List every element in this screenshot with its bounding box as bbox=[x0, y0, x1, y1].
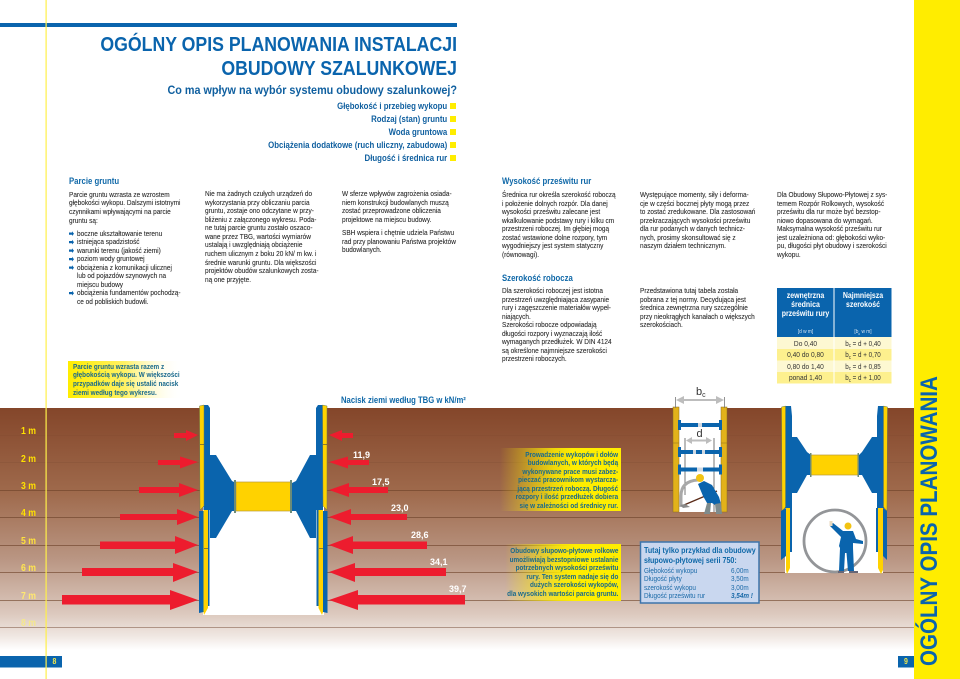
text column 2: projektów obudów szalunkowych zosta- bbox=[205, 266, 319, 275]
depth scale labels: 2 m bbox=[21, 454, 36, 465]
text column 4 top: (równowagi). bbox=[502, 250, 539, 258]
table first column: 0,80 do 1,40 bbox=[787, 362, 824, 370]
chart heading: Nacisk ziemi według TBG w kN/m² bbox=[341, 394, 466, 404]
example box backing bbox=[640, 542, 759, 603]
text column 3: niem konstrukcji budowlanych muszą bbox=[342, 198, 449, 207]
example box labels: Głębokość wykopu bbox=[644, 566, 697, 574]
text column 4 top: wysokości prześwitu zalecane jest bbox=[502, 207, 600, 216]
text: factors list: obciążenia fundamentów pochodzą- bbox=[77, 288, 181, 297]
text column 6: wykopu. bbox=[777, 250, 801, 258]
table second column: bc = d + 0,70 bbox=[845, 350, 881, 360]
right yellow band bbox=[914, 0, 960, 679]
text: factors list: miejscu budowy bbox=[77, 280, 123, 288]
text column 3: W sferze wpływów zagrożenia osiada- bbox=[342, 189, 452, 198]
depth scale labels: 1 m bbox=[21, 426, 36, 437]
text: factors list: lub od pojazdów szynowych na bbox=[77, 271, 166, 280]
text column 4 top: przestrzeni roboczej. Im głębiej mogą bbox=[502, 224, 609, 233]
text column 2: ne tutaj parcie gruntu zostało oszaco- bbox=[205, 223, 312, 232]
example box values: 3,50m bbox=[731, 574, 749, 583]
influence factor list: Głębokość i przebieg wykopu bbox=[337, 101, 447, 111]
text column 4 top: wkalkulowanie podstawy rury i kilku cm bbox=[502, 216, 614, 224]
example box heading: Tutaj tylko przykład dla obudowy bbox=[644, 545, 756, 555]
text: factors list: istniejąca spadzistość bbox=[77, 237, 140, 246]
depth scale labels: 5 m bbox=[21, 536, 36, 547]
text column 5 top: nych, prosimy skonsultować się z bbox=[640, 232, 736, 242]
example box labels bbox=[644, 566, 705, 600]
text column 2: ruchem ulicznym z boku 20 kN/ m kw. i bbox=[205, 249, 316, 258]
text column 5 bottom: przy nieokrągłych kanałach o większych bbox=[640, 312, 755, 320]
text column 2: ustalają i uwzględniają obciążenie bbox=[205, 240, 302, 249]
text: factors list: obciążenia z komunikacji ulicznej bbox=[77, 262, 172, 272]
vertical section title: OGÓLNY OPIS PLANOWANIA bbox=[916, 376, 943, 666]
table first column: Do 0,40 bbox=[794, 338, 817, 348]
text column 6: Maksymalna wysokość prześwitu rur bbox=[777, 224, 882, 233]
arrow bullets bbox=[69, 231, 74, 296]
text column 3 second paragraph: rad przy planowaniu Państwa projektów bbox=[342, 237, 456, 246]
text column 2: ną one przyjęte. bbox=[205, 275, 251, 284]
text: factors list bbox=[77, 228, 181, 306]
ground depth lines bbox=[0, 436, 914, 628]
right shoring and strut bbox=[781, 406, 888, 574]
page number bar left bbox=[0, 656, 62, 668]
text column 4 bottom: niających. bbox=[502, 312, 531, 320]
worker with shovel bbox=[680, 474, 722, 514]
table header right bbox=[843, 291, 884, 309]
table second column: bc = d + 0,40 bbox=[845, 338, 881, 349]
left pressure arrows bbox=[62, 430, 198, 610]
text column 5 top: cje w części bocznej płyty mogą przez bbox=[640, 198, 749, 208]
text: Parcie gruntu intro: czynnikami wpływającymi na parcie bbox=[69, 207, 171, 216]
page number 9: 9 bbox=[904, 657, 908, 666]
depth scale labels: 6 m bbox=[21, 563, 36, 574]
text column 3: zostać przeprowadzone obliczenia bbox=[342, 206, 441, 215]
top blue rule bbox=[0, 23, 457, 27]
text column 6: pu, długości płyt obudowy i szerokości bbox=[777, 241, 887, 250]
text column 5 top: dla rur podanych w danych technicz- bbox=[640, 224, 745, 233]
table first column: 0,40 do 0,80 bbox=[787, 350, 824, 359]
pressure values: 28,6 bbox=[411, 530, 429, 540]
text column 3 second paragraph bbox=[342, 228, 456, 254]
example box values: 3,00m bbox=[731, 582, 749, 592]
example box values bbox=[731, 566, 753, 600]
middle shoring diagram: c bbox=[702, 392, 706, 399]
text: Parcie gruntu intro bbox=[69, 190, 180, 225]
yellow hairline bbox=[46, 0, 47, 679]
title: OGÓLNY OPIS PLANOWANIA INSTALACJI bbox=[100, 34, 457, 56]
example box labels: szerokość wykopu bbox=[644, 582, 696, 592]
example box values: 3,54m ! bbox=[731, 591, 753, 600]
yellow note: working space: jącą przestrzeń roboczą. Długość bbox=[517, 484, 618, 493]
depth scale labels bbox=[21, 426, 36, 629]
text column 5 bottom bbox=[640, 286, 755, 329]
table bbox=[777, 288, 892, 384]
text column 4 bottom bbox=[502, 286, 612, 363]
text column 5 bottom: średnica zewnętrzna rury szczególnie bbox=[640, 303, 748, 312]
text column 4 bottom: przestrzeń uwzględniająca zasypanie bbox=[502, 294, 609, 304]
left shoring and strut bbox=[199, 405, 328, 615]
text: factors list: ce od pobliskich budowli. bbox=[77, 296, 149, 306]
text column 2: wane przez TBG, wartości wymiarów bbox=[205, 232, 311, 241]
yellow note: roller system: Obudowy słupowo-płytowe rolkowe bbox=[510, 546, 618, 555]
dimension arrow: bc bbox=[676, 396, 724, 404]
yellow note backing left bbox=[68, 361, 183, 398]
text column 2: bliżeniu z załączonego wykresu. Poda- bbox=[205, 215, 316, 224]
yellow note: working space: się w zależności od średnicy rur. bbox=[519, 501, 618, 510]
text column 6: Dla Obudowy Słupowo-Płytowej z sys- bbox=[777, 190, 887, 199]
pressure values: 11,9 bbox=[353, 450, 370, 460]
text column 6 bbox=[776, 190, 887, 258]
text column 3 bbox=[342, 189, 452, 224]
table header right: Najmniejsza bbox=[843, 291, 883, 300]
table second column bbox=[845, 338, 881, 384]
text column 2: Nie ma żadnych czułych urządzeń do bbox=[205, 189, 312, 198]
text column 6: temem Rozpór Rolkowych, wysokość bbox=[777, 198, 884, 208]
pressure values: 34,1 bbox=[430, 557, 448, 567]
text column 4 bottom: długości rozpory i wyznaczają ilość bbox=[502, 328, 602, 338]
text: factors list: poziom wody gruntowej bbox=[77, 254, 145, 263]
text column 4 bottom: Szerokości robocze odpowiadają bbox=[502, 320, 597, 329]
text column 2: wykorzystania przy obliczaniu parcia bbox=[205, 198, 310, 207]
table unit right: [bc w m] bbox=[854, 329, 872, 336]
influence factor list bbox=[268, 101, 448, 163]
influence factor list: Obciążenia dodatkowe (ruch uliczny, zabudowa) bbox=[268, 140, 447, 150]
influence factor list: Rodzaj (stan) gruntu bbox=[371, 114, 447, 124]
text column 2: gruntu, zostaje ono odczytane w przy- bbox=[205, 206, 314, 215]
table header right: szerokość bbox=[846, 300, 880, 309]
yellow note: roller system: umożliwiają bezstopniowe ustalanie bbox=[509, 555, 618, 564]
text column 5 bottom: szerokościach. bbox=[640, 320, 683, 329]
example box labels: Długość płyty bbox=[644, 574, 682, 583]
table first column bbox=[787, 338, 824, 382]
text column 5 top bbox=[640, 190, 755, 250]
yellow note: roller system: potrzebnych wysokości prześwitu bbox=[515, 563, 618, 572]
ground gradient bbox=[0, 408, 914, 650]
pressure values bbox=[353, 450, 467, 594]
text column 3 second paragraph: budowlanych. bbox=[342, 245, 382, 254]
yellow note: working space: rozpory i ilość przedłużek dobiera bbox=[516, 492, 618, 501]
influence factor list: Woda gruntowa bbox=[388, 127, 447, 137]
table unit left: [d w m] bbox=[798, 329, 813, 335]
text: factors list: boczne ukształtowanie terenu bbox=[77, 228, 162, 238]
text column 4 top: zostać wstawione dolne rozpory, tym bbox=[502, 232, 607, 242]
text column 4 bottom: rury i zagęszczenie materiałów wypeł- bbox=[502, 303, 611, 312]
text column 4 top: wygodniejszy jest system statyczny bbox=[502, 241, 603, 250]
example box labels: Długość prześwitu rur bbox=[644, 591, 705, 600]
subtitle: Co ma wpływ na wybór systemu obudowy szalunkowej? bbox=[167, 85, 457, 97]
faded yellow note backing 2 bbox=[505, 544, 621, 601]
pressure values: 39,7 bbox=[449, 584, 467, 594]
heading: Szerokość robocza: Szerokość robocza bbox=[502, 272, 573, 284]
text column 6: prześwitu dla rur może być bezstop- bbox=[777, 207, 881, 216]
text: factors list: warunki terenu (jakość ziemi) bbox=[77, 246, 161, 254]
yellow note: roller system: rury. Ten system nadaje się do bbox=[526, 572, 618, 581]
yellow note: working space: wykonywane prace musi zabez- bbox=[522, 467, 618, 476]
yellow note: pressure bbox=[73, 362, 180, 397]
heading: Parcie gruntu: Parcie gruntu bbox=[69, 176, 119, 186]
table header left: prześwitu rury bbox=[782, 309, 829, 318]
yellow note: pressure: Parcie gruntu wzrasta razem z bbox=[73, 362, 164, 370]
table header left bbox=[782, 291, 830, 318]
text: Parcie gruntu intro: gruntu są: bbox=[69, 216, 98, 225]
middle shoring diagram: d bbox=[696, 428, 703, 440]
yellow note: working space: Prowadzenie wykopów i dołów bbox=[525, 450, 618, 458]
table second column: bc = d + 1,00 bbox=[845, 373, 881, 384]
text column 5 bottom: Przedstawiona tutaj tabela została bbox=[640, 286, 738, 295]
yellow note: roller system bbox=[507, 546, 618, 598]
pipe ring bbox=[804, 510, 866, 572]
text column 3 second paragraph: SBH wspiera i chętnie udziela Państwu bbox=[342, 228, 454, 237]
depth scale labels: 7 m bbox=[21, 591, 36, 602]
pressure values: 17,5 bbox=[372, 477, 390, 487]
text column 5 bottom: pobrana z tej normy. Decydująca jest bbox=[640, 294, 746, 304]
text column 2: średnie warunki gruntu. Dla większości bbox=[205, 258, 316, 266]
heading: Wysokość prześwitu rur: Wysokość prześwitu rur bbox=[502, 176, 591, 186]
table header left: średnica bbox=[791, 300, 820, 309]
text column 5 top: Występujące momenty, siły i deforma- bbox=[640, 190, 749, 199]
yellow note: working space: budowlanych, w których będą bbox=[528, 458, 618, 467]
pressure values: 23,0 bbox=[391, 503, 409, 513]
yellow note: pressure: głębokością wykopu. W większości bbox=[73, 370, 180, 379]
dimension arrow: d bbox=[686, 437, 712, 444]
text: Parcie gruntu intro: Parcie gruntu wzrasta ze wzrostem bbox=[69, 190, 170, 198]
faded yellow note backing 1 bbox=[500, 448, 621, 511]
worker figure bbox=[830, 521, 863, 572]
text column 3: projektowe na miejscu budowy. bbox=[342, 215, 431, 224]
yellow note: roller system: dla wysokich wartości parcia gruntu. bbox=[507, 589, 618, 598]
text: Parcie gruntu intro: głębokości wykopu. Dalszymi istotnymi bbox=[69, 198, 180, 207]
right pressure arrows bbox=[329, 430, 465, 610]
title bbox=[100, 32, 457, 80]
text column 4 top: i położenie dolnych rozpór. Dla danej bbox=[502, 198, 608, 208]
excavation: right trench bbox=[785, 404, 883, 573]
text column 4 bottom: przestrzeni roboczych. bbox=[502, 354, 567, 363]
yellow note: working space bbox=[516, 450, 618, 510]
table header left: zewnętrzna bbox=[787, 291, 824, 300]
middle shoring diagram bbox=[673, 386, 727, 512]
excavation: left trench bbox=[203, 404, 324, 615]
text column 6: jest uzależniona od: głębokości wyko- bbox=[777, 232, 885, 242]
excavation: middle trench bbox=[676, 404, 724, 512]
text column 4 top: Średnica rur określa szerokość roboczą bbox=[502, 190, 616, 199]
depth scale labels: 4 m bbox=[21, 508, 36, 519]
page number box right bbox=[898, 656, 914, 668]
example box heading bbox=[644, 545, 756, 565]
text column 4 bottom: wymaganych przedłużek. W DIN 4124 bbox=[502, 337, 612, 346]
depth scale labels: 3 m bbox=[21, 481, 36, 492]
example box values: 6,00m bbox=[731, 566, 749, 574]
text column 5 top: to zostać zredukowane. Dla zastosowań bbox=[640, 207, 755, 216]
table second column: bc = d + 0,85 bbox=[845, 362, 881, 372]
middle shoring diagram: b bbox=[696, 386, 702, 398]
text column 4 bottom: Dla szerokości roboczej jest istotna bbox=[502, 286, 603, 295]
title: OBUDOWY SZALUNKOWEJ bbox=[221, 58, 457, 80]
text column 5 top: przekraczających wysokości prześwitu bbox=[640, 216, 750, 224]
list square bullets bbox=[450, 103, 456, 161]
yellow note: roller system: dużych szerokości wykopów, bbox=[530, 580, 618, 589]
text column 5 top: naszym działem technicznym. bbox=[640, 241, 726, 250]
text column 6: niowo dopasowana do wymagań. bbox=[777, 216, 873, 224]
text column 4 bottom: są określone najmniejsze szerokości bbox=[502, 346, 607, 354]
text column 2 bbox=[205, 189, 319, 284]
text column 4 top bbox=[502, 190, 616, 258]
influence factor list: Długość i średnica rur bbox=[364, 153, 447, 163]
table first column: ponad 1,40 bbox=[789, 373, 822, 382]
yellow note: pressure: ziemi według tego wykresu. bbox=[73, 388, 157, 397]
page number 8: 8 bbox=[53, 657, 56, 666]
example box heading: słupowo-płytowej serii 750: bbox=[644, 555, 737, 565]
yellow note: pressure: przypadków daje się ustalić nacisk bbox=[73, 379, 178, 388]
depth scale labels: 8 m bbox=[21, 618, 36, 629]
yellow note: working space: pieczać pracownikom wystarcza- bbox=[518, 475, 618, 484]
